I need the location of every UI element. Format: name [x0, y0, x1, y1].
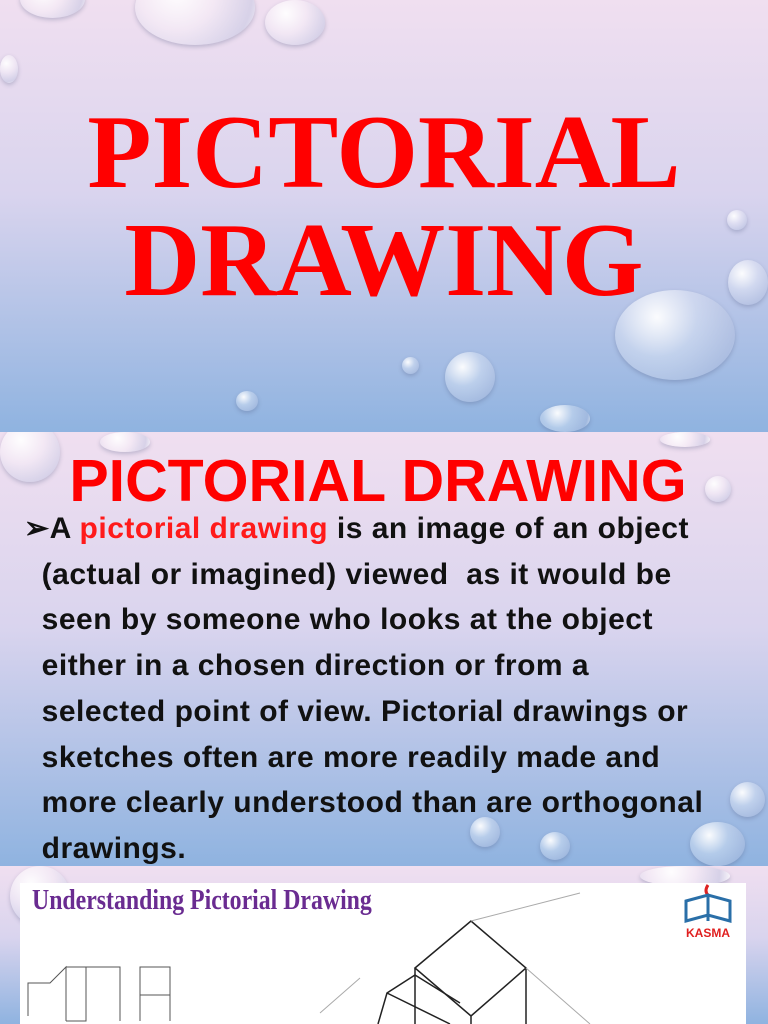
- logo: [684, 884, 732, 940]
- heading: PICTORIAL DRAWING: [69, 448, 687, 514]
- body text: [24, 512, 703, 865]
- body text: ➢A pictorial drawing is an image of an object: [24, 512, 689, 545]
- slide 3: image: [0, 866, 768, 1024]
- title: [87, 93, 681, 318]
- title: DRAWING: [124, 201, 644, 318]
- body text: seen by someone who looks at the object: [42, 603, 653, 636]
- body text: either in a chosen direction or from a: [42, 649, 589, 682]
- image title: Understanding Pictorial Drawing: [32, 885, 372, 916]
- body text: selected point of view. Pictorial drawings or: [42, 695, 688, 728]
- body text: drawings.: [42, 832, 186, 865]
- body text: more clearly understood than are orthogonal: [42, 786, 703, 819]
- slide 1: title: [0, 0, 768, 432]
- body text: sketches often are more readily made and: [42, 741, 660, 774]
- logo: KASMA: [686, 926, 730, 940]
- image panel: [20, 883, 746, 1024]
- slide 2: definition: [0, 432, 768, 866]
- drawing: [28, 892, 590, 1024]
- body text: (actual or imagined) viewed as it would be: [42, 558, 672, 591]
- title: PICTORIAL: [87, 93, 681, 210]
